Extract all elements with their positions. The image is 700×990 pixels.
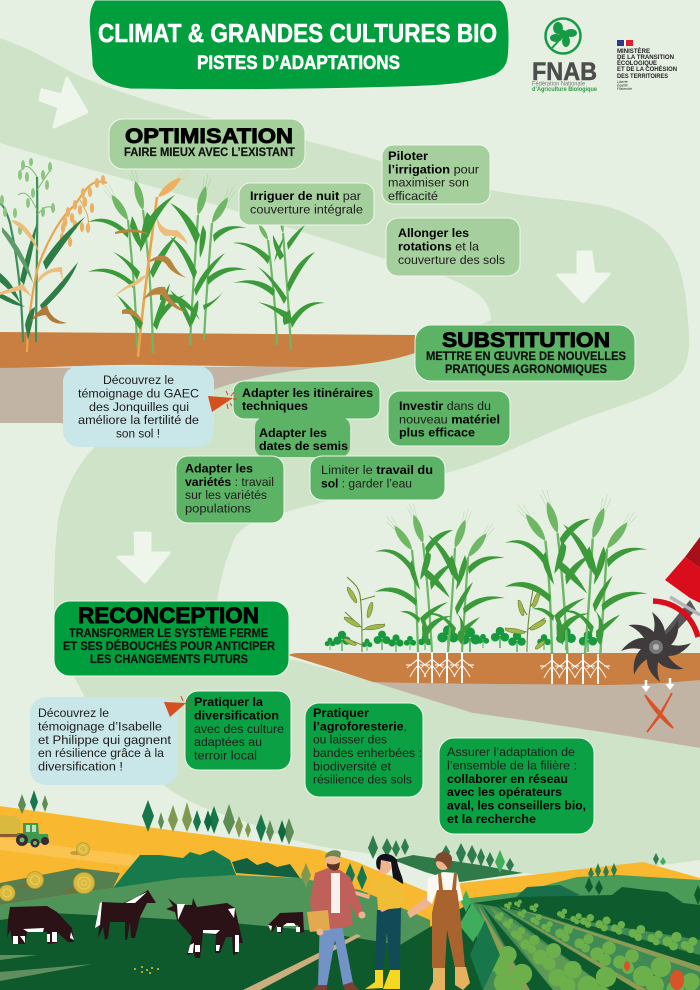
logo: FNAB: d’Agriculture Biologique bbox=[532, 87, 598, 93]
card: adapter les variétés: variétés : travail bbox=[185, 475, 274, 489]
card: irriguer de nuit: Irriguer de nuit par bbox=[250, 189, 361, 203]
yellow fields bbox=[0, 806, 700, 990]
wheat plants upper bbox=[88, 167, 325, 357]
card: piloter l'irrigation: efficacité bbox=[388, 189, 438, 203]
card: filière: et la recherche bbox=[447, 812, 536, 826]
logo: ministère: DES TERRITOIRES bbox=[617, 73, 669, 80]
card: diversification: terroir local bbox=[194, 748, 257, 762]
card: allonger les rotations bbox=[386, 218, 520, 276]
card: irriguer de nuit: couverture intégrale bbox=[250, 202, 363, 216]
card: piloter l'irrigation: l’irrigation pour bbox=[388, 162, 479, 176]
callout: Isabelle et Philippe: témoignage d’Isabelle bbox=[38, 720, 162, 734]
logo: FNAB: FNAB bbox=[532, 58, 597, 86]
card: adapter les dates: dates de semis bbox=[259, 439, 348, 453]
callout: Isabelle et Philippe: et Philippe qui gagnent bbox=[38, 733, 172, 747]
wheat, clover and pea plants lower bbox=[325, 488, 648, 684]
icon: orange cross bbox=[645, 693, 673, 732]
card: agroforesterie: Pratiquer bbox=[313, 706, 369, 720]
dark foreground bbox=[0, 903, 490, 990]
card: filière bbox=[439, 738, 594, 834]
logo: FNAB: Fédération Nationale bbox=[532, 82, 586, 88]
card: diversification: avec des culture bbox=[194, 722, 284, 736]
arrow: to substitution bbox=[558, 252, 609, 302]
card: filière: l’ensemble de la filière : bbox=[447, 758, 577, 772]
card: filière: collaborer en réseau bbox=[447, 772, 568, 786]
card: investir: Investir dans du bbox=[399, 399, 491, 413]
oat plants bbox=[0, 158, 107, 352]
subtitle: PISTES D’ADAPTATIONS bbox=[197, 53, 400, 74]
person: woman in yellow bbox=[355, 854, 405, 989]
logo: FNAB bbox=[532, 18, 598, 93]
card: limiter le travail du sol bbox=[310, 456, 445, 500]
card: filière: avec les opérateurs bbox=[447, 785, 562, 799]
cows and horse bbox=[7, 890, 304, 958]
logo: ministère: Fraternité bbox=[617, 87, 632, 91]
card: diversification: Pratiquer la bbox=[194, 695, 263, 709]
logo: ministère: MINISTÈRE bbox=[617, 46, 651, 55]
card: adapter les itinéraires bbox=[233, 381, 380, 419]
callout: Isabelle et Philippe: diversification ! bbox=[38, 760, 123, 774]
callout: GAEC des Jonquilles bbox=[63, 366, 214, 447]
path bbox=[243, 934, 361, 990]
card: limiter le travail du sol: sol : garder l’eau bbox=[321, 476, 412, 490]
card: adapter les variétés: sur les variétés bbox=[185, 488, 267, 502]
card: agroforesterie: résilience des sols bbox=[313, 772, 412, 786]
back and mid green hills bbox=[0, 850, 700, 960]
icon: orange pointer one bbox=[208, 391, 237, 412]
card: adapter les variétés: Adapter les bbox=[185, 462, 253, 476]
title banner bbox=[89, 0, 509, 90]
card: adapter les dates: Adapter les bbox=[259, 426, 327, 440]
card: adapter les itinéraires: techniques bbox=[242, 399, 308, 413]
soil: lower section bbox=[288, 653, 700, 748]
card: agroforesterie: bandes enherbées : bbox=[313, 746, 422, 760]
hay bales bbox=[0, 842, 94, 901]
icon: orange pointer two bbox=[164, 696, 192, 717]
logo: ministère: ÉCOLOGIQUE bbox=[617, 58, 658, 67]
card: filière: aval, les conseillers bio, bbox=[447, 798, 586, 812]
callout: GAEC des Jonquilles: son sol ! bbox=[116, 426, 160, 440]
card: adapter les itinéraires: Adapter les itinéraires bbox=[242, 386, 373, 400]
arrow: to optimisation bbox=[40, 78, 87, 127]
panel: substitution heading: METTRE EN ŒUVRE DE NOUVELLES bbox=[426, 349, 626, 363]
person: farmer with clipboard bbox=[307, 850, 366, 990]
card: limiter le travail du sol: Limiter le travail du bbox=[321, 463, 433, 477]
tiller machine bbox=[621, 537, 700, 692]
panel: optimisation heading: FAIRE MIEUX AVEC L’EXISTANT bbox=[124, 145, 296, 159]
card: adapter les variétés: populations bbox=[185, 502, 251, 516]
callout: GAEC des Jonquilles: Découvrez le bbox=[103, 373, 174, 387]
panel: reconception heading: ET SES DÉBOUCHÉS POUR ANTICIPER bbox=[63, 638, 275, 653]
card: investir bbox=[388, 391, 510, 446]
card: agroforesterie: l’agroforesterie, bbox=[313, 720, 407, 734]
soil: upper section bbox=[0, 332, 415, 440]
card: allonger les rotations: rotations et la bbox=[398, 240, 479, 254]
logo: ministère bbox=[617, 40, 677, 91]
callout: GAEC des Jonquilles: améliore la fertilité de bbox=[78, 413, 199, 427]
card: allonger les rotations: couverture des sols bbox=[398, 253, 505, 267]
card: piloter l'irrigation: Piloter bbox=[388, 149, 428, 163]
panel: substitution heading: PRATIQUES AGRONOMIQUES bbox=[445, 362, 607, 376]
card: investir: plus efficace bbox=[399, 426, 475, 440]
panel: substitution heading bbox=[415, 325, 635, 381]
callout: Isabelle et Philippe: Découvrez le bbox=[38, 706, 109, 720]
panel: reconception heading: TRANSFORMER LE SYSTÈME FERME bbox=[69, 625, 268, 640]
crop field bbox=[473, 900, 700, 990]
card: investir: nouveau matériel bbox=[399, 412, 500, 426]
panel: reconception heading: RECONCEPTION bbox=[78, 603, 259, 628]
person: farmer in overalls bbox=[407, 852, 470, 990]
card: piloter l'irrigation: maximiser son bbox=[388, 176, 469, 190]
callout: GAEC des Jonquilles: témoignage du GAEC bbox=[78, 386, 199, 400]
card: diversification bbox=[185, 691, 291, 770]
card: piloter l'irrigation bbox=[382, 145, 490, 204]
card: agroforesterie: biodiversité et bbox=[313, 760, 392, 774]
title: CLIMAT & GRANDES CULTURES BIO bbox=[98, 18, 497, 48]
panel: substitution heading: SUBSTITUTION bbox=[442, 329, 610, 352]
card: adapter les variétés bbox=[176, 456, 284, 523]
panel: reconception heading: LES CHANGEMENTS FUTURS bbox=[90, 652, 248, 666]
trees bbox=[18, 790, 700, 990]
logo: ministère: Égalité bbox=[617, 82, 628, 88]
arrow: to reconception bbox=[118, 533, 169, 582]
callout: Isabelle et Philippe: en résilience grâce à la bbox=[38, 746, 164, 760]
landscape bbox=[0, 790, 700, 990]
panel: reconception heading bbox=[54, 601, 289, 676]
card: adapter les dates bbox=[255, 417, 350, 457]
logo: ministère: Liberté bbox=[617, 80, 628, 84]
callout: Isabelle et Philippe bbox=[30, 697, 178, 785]
card: diversification: adaptées au bbox=[194, 735, 262, 749]
card: agroforesterie: ou laisser des bbox=[313, 732, 387, 746]
tractor bbox=[0, 815, 49, 848]
callout: GAEC des Jonquilles: des Jonquilles qui bbox=[89, 400, 189, 414]
card: diversification: diversification bbox=[194, 708, 279, 722]
logo: ministère: ET DE LA COHÉSION bbox=[617, 64, 677, 73]
card: agroforesterie bbox=[305, 703, 423, 797]
card: filière: Assurer l’adaptation de bbox=[447, 745, 575, 759]
card: irriguer de nuit bbox=[239, 183, 374, 225]
panel: optimisation heading bbox=[109, 119, 305, 169]
logo: ministère: DE LA TRANSITION bbox=[617, 54, 674, 61]
card: allonger les rotations: Allonger les bbox=[398, 226, 469, 240]
panel: optimisation heading: OPTIMISATION bbox=[125, 125, 293, 148]
